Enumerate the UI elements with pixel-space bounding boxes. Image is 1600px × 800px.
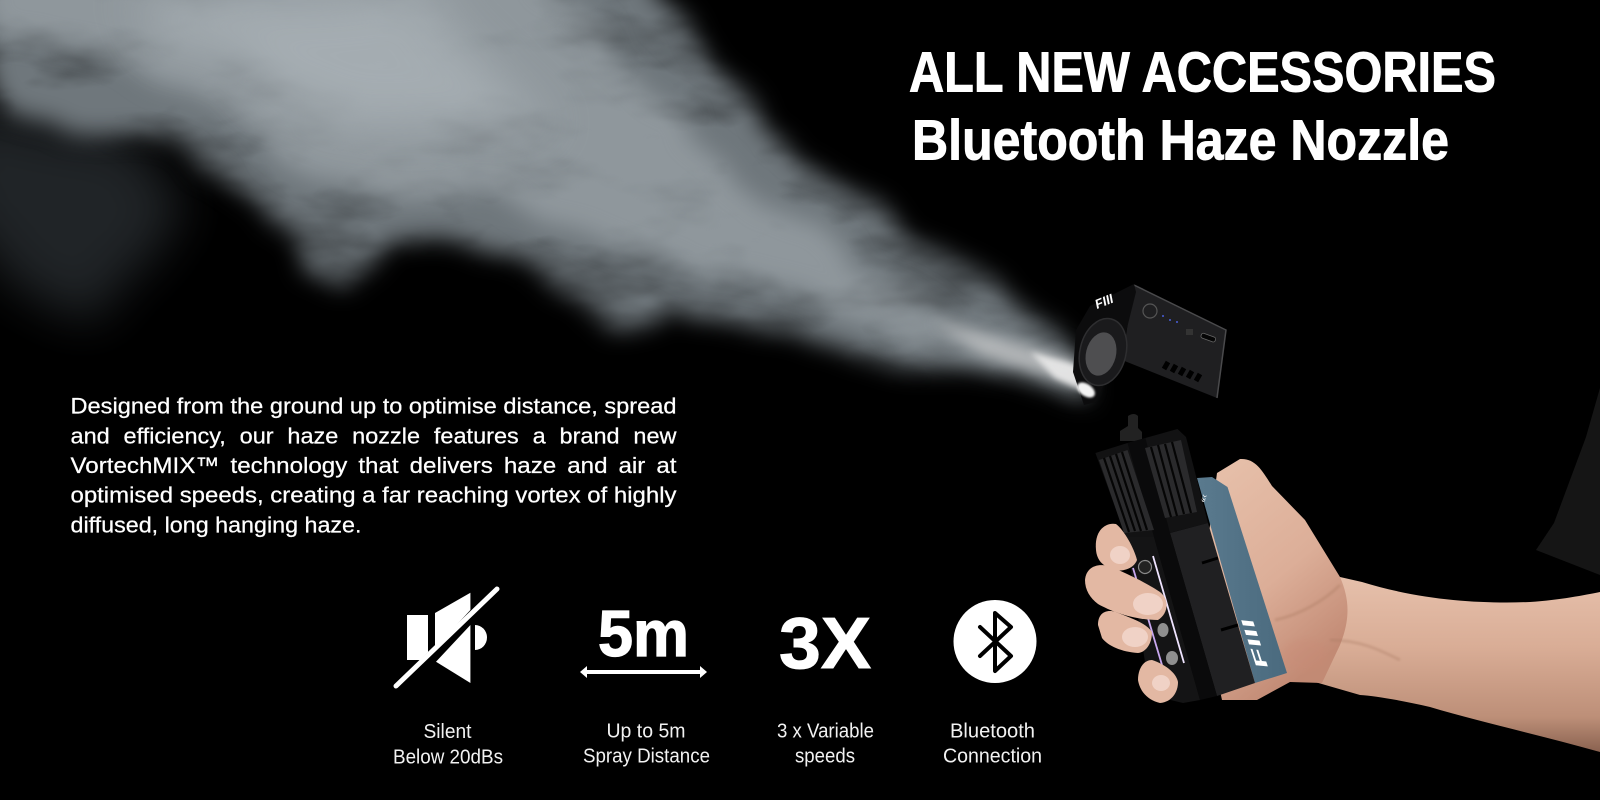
label: silent: Silent [424, 721, 472, 743]
label: bluetooth connection [943, 721, 1042, 768]
forearm and palm [1200, 459, 1600, 752]
label: variable speeds [777, 721, 874, 768]
title [909, 41, 1496, 172]
label: variable speeds: 3 x Variable [777, 721, 874, 743]
teal side panel [1197, 477, 1287, 683]
icon: bluetooth [954, 600, 1036, 683]
right vent [1145, 440, 1197, 518]
label: silent [393, 721, 503, 768]
device arrows: «‹ [1197, 493, 1209, 504]
icon: silent speaker [396, 589, 497, 686]
device control strip [1133, 556, 1184, 665]
description paragraph: optimised speeds, creating a far reaching vortex of highly [70, 483, 677, 508]
description paragraph: Designed from the ground up to optimise distance, spread [70, 393, 676, 418]
description paragraph: VortechMIX™ technology that delivers haze and air at [70, 453, 677, 478]
icon: 5m distance [580, 597, 707, 678]
main black panel [1170, 523, 1255, 696]
device slots [1202, 558, 1238, 630]
icon: 5m distance: 5m [598, 597, 689, 670]
label: spray distance: Up to 5m [606, 721, 686, 743]
description paragraph: diffused, long hanging haze. [70, 513, 362, 538]
fingers gripping device [1085, 524, 1178, 703]
device top block [1095, 429, 1208, 537]
label: spray distance: Spray Distance [583, 746, 710, 768]
control panel [1126, 537, 1200, 703]
description paragraph: and efficiency, our haze nozzle features a brand new [70, 423, 677, 448]
left vent [1099, 450, 1154, 533]
detached haze nozzle [1072, 284, 1226, 405]
title: Bluetooth Haze Nozzle [912, 108, 1449, 172]
haze plume [0, 0, 1088, 392]
label: variable speeds: speeds [795, 746, 855, 768]
fingernails [1110, 546, 1170, 691]
label: silent: Below 20dBs [393, 746, 503, 768]
description paragraph [70, 393, 677, 538]
black sleeve [1536, 388, 1600, 575]
label: bluetooth connection: Bluetooth [950, 721, 1035, 743]
handheld device [1095, 414, 1287, 703]
title: ALL NEW ACCESSORIES [909, 41, 1496, 105]
device logo: FIII [1239, 615, 1272, 671]
device stem [1120, 414, 1142, 441]
label: spray distance [583, 721, 710, 768]
dark strip [1128, 438, 1217, 700]
label: bluetooth connection: Connection [943, 746, 1042, 768]
detached haze nozzle: FIII [1093, 291, 1116, 312]
icon: 3X speeds: 3X [779, 604, 871, 684]
